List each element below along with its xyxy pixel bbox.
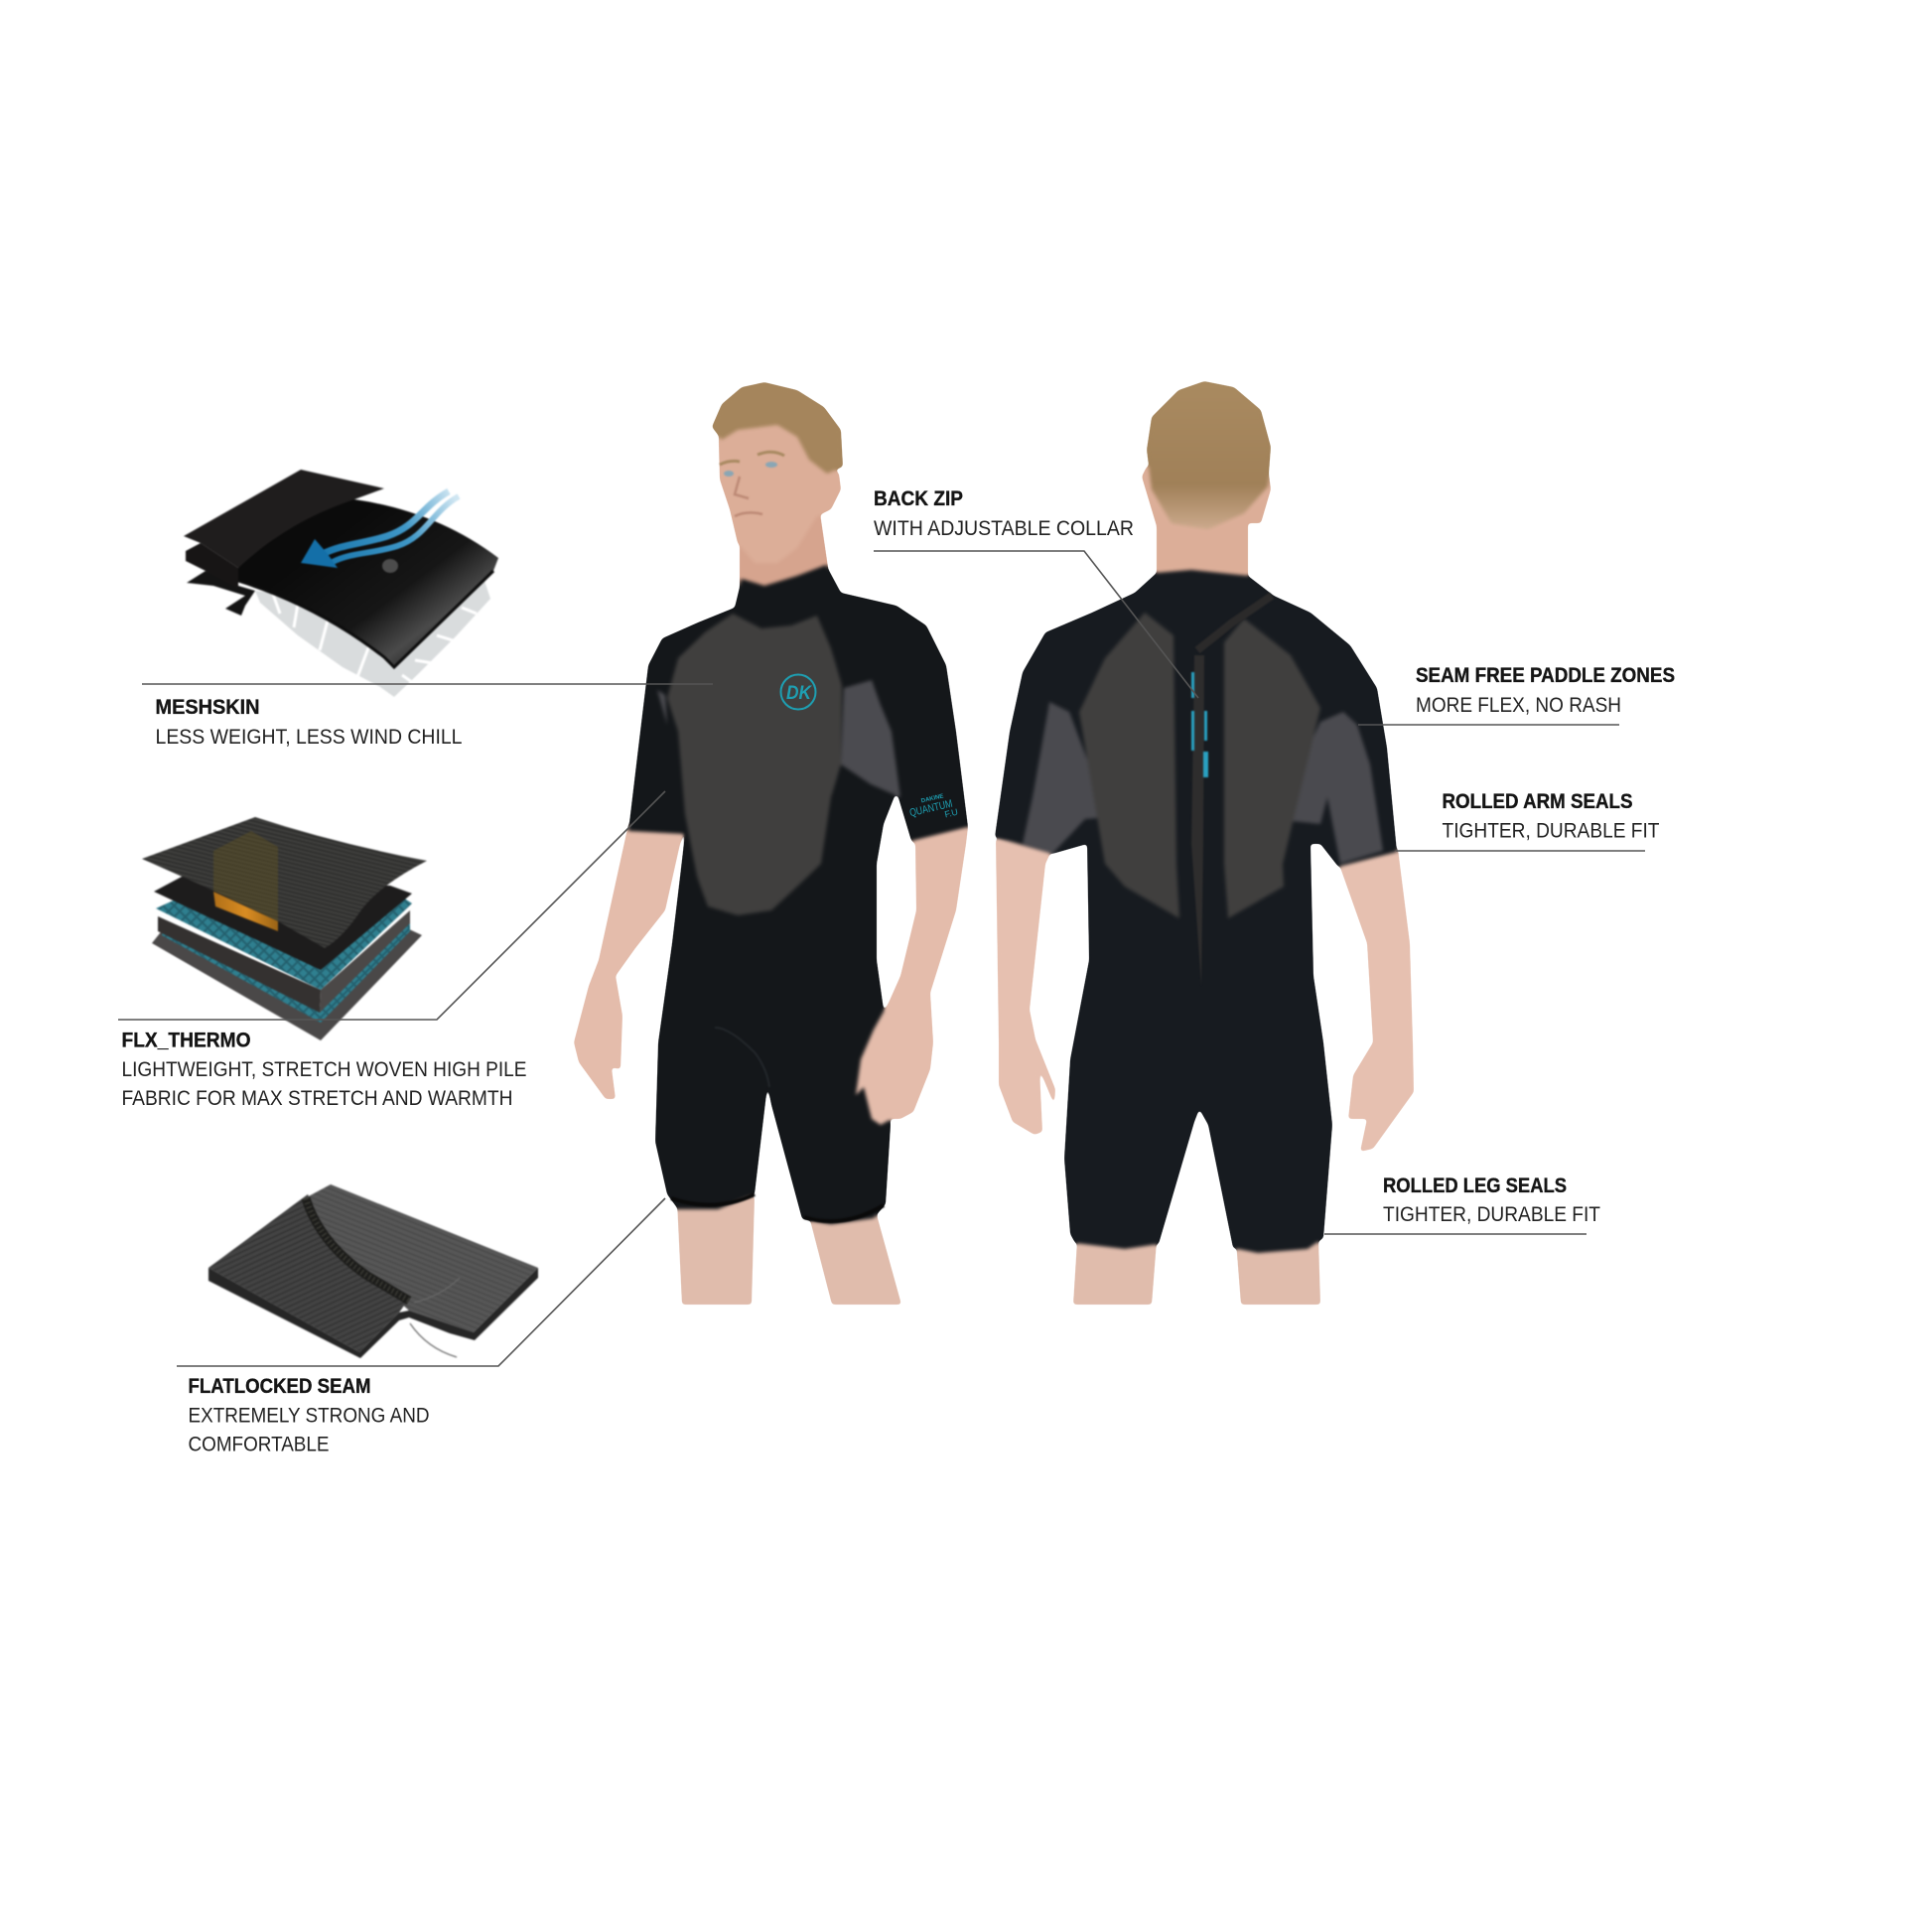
connector: flatlocked seam <box>177 1198 665 1366</box>
right arm and hand <box>1338 849 1414 1152</box>
sleeve label: F.U <box>943 807 959 819</box>
label: meshskin: LESS WEIGHT, LESS WIND CHILL <box>155 726 463 749</box>
label: meshskin: MESHSKIN <box>155 696 260 719</box>
middle black layer <box>186 543 238 589</box>
right arm and hand <box>856 827 968 1125</box>
top woven sheet <box>142 817 427 948</box>
label: back zip <box>874 487 1134 540</box>
foam block front <box>158 916 321 1013</box>
top fabric sheet <box>184 470 384 568</box>
label: flatlocked seam <box>189 1375 429 1455</box>
sleeve label: QUANTUM <box>908 798 954 819</box>
side panel right <box>841 680 900 797</box>
mesh backing <box>255 581 490 697</box>
figure: wetsuit front view <box>574 382 968 1305</box>
flatlock stitching <box>306 1198 409 1301</box>
stitch texture <box>306 1198 409 1301</box>
chest panel <box>667 614 842 915</box>
connector: rolled arm seals <box>1396 850 1645 852</box>
sleeve label: DAKINE <box>920 793 944 804</box>
connector: rolled leg seals <box>1324 1233 1587 1235</box>
label: rolled leg seals: ROLLED LEG SEALS <box>1383 1174 1567 1197</box>
front face details <box>671 452 884 1221</box>
label: rolled arm seals: TIGHTER, DURABLE FIT <box>1442 820 1660 842</box>
connector: flx thermo <box>118 791 665 1020</box>
label: meshskin <box>155 696 463 749</box>
right fabric piece <box>305 1184 538 1332</box>
translucent heat column <box>213 831 278 921</box>
back zip details <box>1191 596 1272 986</box>
eyes <box>724 462 777 477</box>
bottom sheet <box>152 928 422 1040</box>
fabric edge thickness <box>208 1268 538 1358</box>
connector: seam free paddle zones <box>1358 724 1619 726</box>
logo: DK chest badge <box>780 675 816 709</box>
label: seam free paddle zones: SEAM FREE PADDLE ZONES <box>1416 664 1675 687</box>
blue airflow arrow <box>323 491 459 562</box>
swatch: flx thermo layers <box>142 817 427 1040</box>
orange heat area <box>213 892 278 931</box>
suit body <box>995 570 1397 1253</box>
sleeve label <box>907 791 959 827</box>
connector: back zip <box>874 551 1198 698</box>
label: flx thermo: FLX_THERMO <box>121 1029 250 1052</box>
zip <box>1191 655 1204 986</box>
back panel right <box>1224 619 1320 918</box>
leg hems <box>671 1194 884 1221</box>
brows <box>720 452 784 465</box>
neck <box>740 506 830 596</box>
back panel left <box>1079 613 1179 918</box>
connector: meshskin <box>142 683 713 685</box>
left fabric piece <box>208 1194 409 1352</box>
crotch seam <box>715 1028 769 1087</box>
label: flx thermo: LIGHTWEIGHT, STRETCH WOVEN HIGH PILE <box>121 1058 526 1081</box>
left arm and hand <box>574 824 685 1099</box>
arrow head <box>301 539 338 568</box>
label: flatlocked seam: FLATLOCKED SEAM <box>189 1375 371 1398</box>
lower fabric sheet <box>187 571 255 616</box>
label: flx thermo <box>121 1029 526 1110</box>
thread ends <box>410 1278 460 1357</box>
lower teal mesh <box>162 921 410 1023</box>
label: flatlocked seam: COMFORTABLE <box>189 1434 330 1455</box>
legs <box>1073 1239 1320 1305</box>
hair <box>1147 381 1271 529</box>
label: seam free paddle zones: MORE FLEX, NO RASH <box>1416 694 1621 717</box>
hair <box>712 382 843 474</box>
neck and ears <box>1142 467 1271 584</box>
thick curved panel <box>238 499 498 665</box>
foam block side <box>320 910 410 1013</box>
suit body <box>628 565 968 1224</box>
figure: wetsuit back view <box>995 381 1414 1305</box>
nose and mouth <box>735 477 762 516</box>
label: flx thermo: FABRIC FOR MAX STRETCH AND WARMTH <box>121 1087 512 1110</box>
label: seam free paddle zones <box>1416 664 1675 717</box>
sleeve panel left <box>1023 702 1109 854</box>
label: rolled arm seals <box>1442 790 1660 842</box>
label: back zip: BACK ZIP <box>874 487 963 510</box>
label: flatlocked seam: EXTREMELY STRONG AND <box>189 1404 429 1428</box>
legs <box>677 1196 901 1305</box>
label: rolled leg seals <box>1383 1174 1600 1226</box>
label: rolled leg seals: TIGHTER, DURABLE FIT <box>1383 1203 1600 1226</box>
swatch: meshskin layers <box>184 470 498 697</box>
swatch: flatlocked seam <box>208 1184 538 1358</box>
label: back zip: WITH ADJUSTABLE COLLAR <box>874 517 1134 540</box>
side panel left <box>657 690 667 725</box>
black inner sheet <box>154 877 412 970</box>
upper teal mesh <box>156 894 412 990</box>
face <box>719 417 841 563</box>
logo: DK chest badge: DK <box>786 683 812 704</box>
water droplet <box>382 559 398 573</box>
teal zip marks <box>1191 672 1208 777</box>
sleeve panel right <box>1291 712 1383 864</box>
left arm and hand <box>996 839 1055 1135</box>
label: rolled arm seals: ROLLED ARM SEALS <box>1442 790 1632 813</box>
collar zip flap <box>1197 596 1272 650</box>
